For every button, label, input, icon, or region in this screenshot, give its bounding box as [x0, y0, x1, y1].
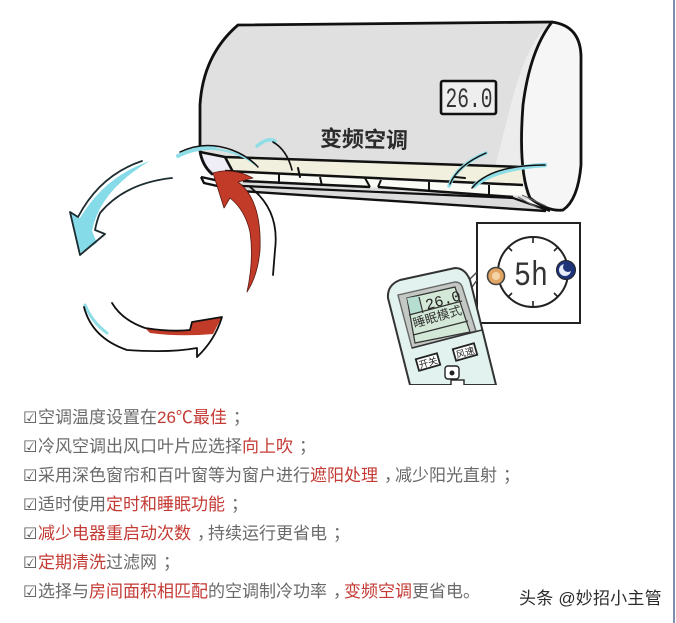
unit body	[200, 22, 581, 210]
callout pointer	[462, 272, 477, 293]
icon: sun	[488, 268, 504, 284]
clock label 5h: 5h	[514, 258, 548, 296]
remote screen bezel	[398, 282, 476, 348]
remote small buttons	[445, 366, 464, 387]
tip 7: ☑	[23, 582, 37, 601]
remote control	[388, 268, 496, 387]
tip 2: 冷风空调出风口叶片应选择向上吹 ；	[38, 437, 316, 456]
airflow wisps at vent	[178, 140, 545, 188]
arrow: cold air flowing down left	[70, 161, 172, 255]
tip 7: 选择与房间面积相匹配的空调制冷功率 ，变频空调更省电。	[38, 582, 480, 601]
brand label: 变频空调	[320, 126, 408, 153]
arrow: warm air rising into unit	[213, 171, 276, 292]
tip 2: ☑	[23, 437, 37, 456]
outlines	[200, 22, 552, 174]
lower louver	[201, 177, 546, 210]
screen label 睡眠模式: 睡眠模式	[411, 303, 464, 331]
cream air vent strip	[225, 157, 523, 185]
tip 6: ☑	[23, 553, 37, 572]
tip 5: 减少电器重启动次数 ，持续运行更省电 ；	[38, 524, 350, 543]
icon: moon	[556, 260, 576, 280]
tip 5: ☑	[23, 524, 37, 543]
end cap	[522, 22, 581, 210]
tip 4: 适时使用定时和睡眠功能 ；	[38, 495, 248, 514]
tip 6: 定期清洗过滤网 ；	[38, 553, 180, 572]
watermark: 头条 @妙招小主管	[519, 589, 662, 608]
air conditioner unit	[200, 22, 581, 211]
tip 1: 空调温度设置在26℃最佳 ；	[38, 408, 250, 427]
tip 3: 采用深色窗帘和百叶窗等为窗户进行遮阳处理 ，减少阳光直射 ；	[38, 466, 520, 485]
tip 3: ☑	[23, 466, 37, 485]
tip 4: ☑	[23, 495, 37, 514]
screen reading 26.0: 26.0	[424, 288, 463, 315]
arrow: airflow returning along the bottom	[84, 303, 222, 357]
tips list	[23, 408, 520, 601]
timer callout	[477, 223, 580, 323]
display: 26.0	[441, 81, 496, 116]
clock dial	[498, 237, 568, 307]
remote button: 风速: 风速	[455, 345, 477, 361]
display: 26.0: 26.0	[446, 85, 492, 116]
page edge line	[673, 0, 675, 623]
tip 1: ☑	[23, 408, 37, 427]
illustration: air conditioner, airflow and remote	[69, 20, 582, 385]
remote screen	[407, 287, 470, 343]
remote button: 开关: 开关	[417, 354, 440, 371]
